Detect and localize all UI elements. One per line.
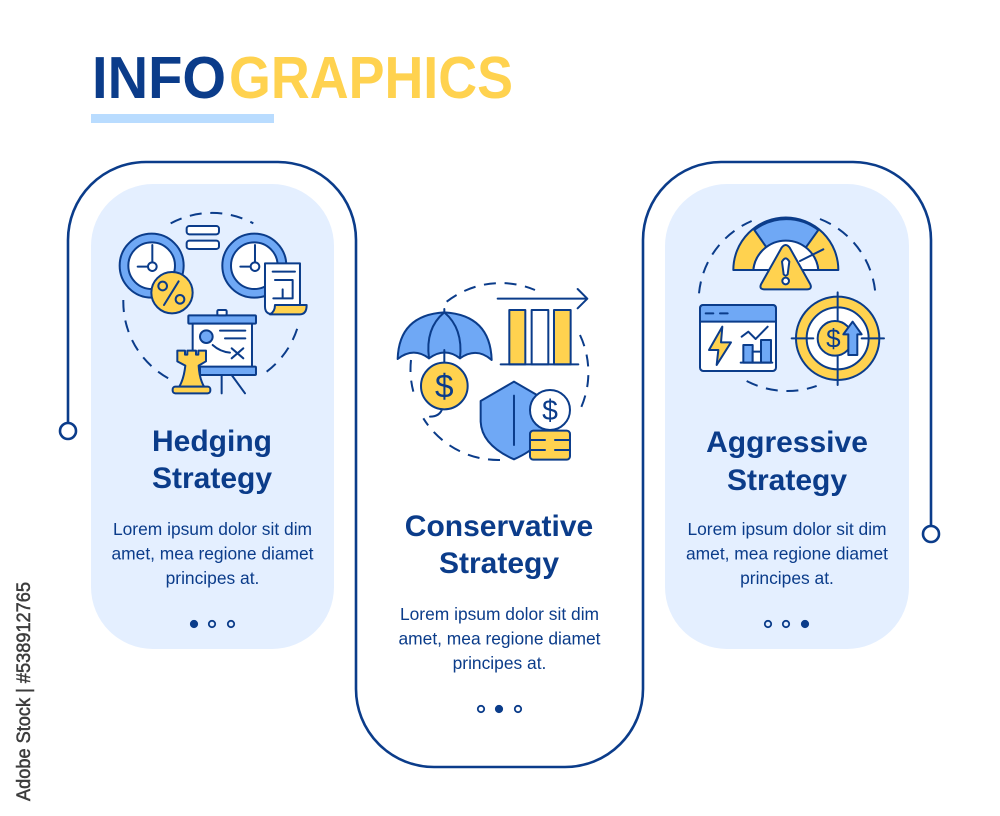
panel background: aggressive <box>665 184 909 649</box>
heading: aggressive: Aggressive <box>706 426 868 459</box>
icon: aggressive strategy <box>699 217 884 391</box>
text block: conservative: Lorem ipsum dolor sit dim <box>400 604 599 624</box>
panel background: hedging <box>91 184 334 649</box>
heading: aggressive line two: Strategy <box>727 464 847 497</box>
text block: hedging: principes at. <box>166 568 259 588</box>
text block: aggressive: amet, mea regione diamet <box>686 544 888 564</box>
title: GRAPHICS <box>229 45 513 111</box>
heading: conservative: Conservative <box>405 510 593 543</box>
pagination dots: conservative <box>478 706 521 712</box>
text block: conservative: principes at. <box>453 653 546 673</box>
icon: conservative strategy: $ <box>542 395 558 427</box>
text block: hedging: Lorem ipsum dolor sit dim <box>113 519 312 539</box>
text block: conservative: amet, mea regione diamet <box>398 628 601 648</box>
text block: aggressive: Lorem ipsum dolor sit dim <box>687 519 887 539</box>
heading: hedging line two: Strategy <box>152 462 272 495</box>
text block: aggressive: principes at. <box>740 568 834 588</box>
title <box>92 45 513 111</box>
heading: conservative line two: Strategy <box>439 547 559 580</box>
title: INFO <box>92 45 226 111</box>
connecting outline <box>60 162 939 767</box>
icon: conservative strategy: $ <box>435 369 454 406</box>
icon: hedging strategy <box>120 213 307 393</box>
pagination dots: aggressive <box>765 621 808 627</box>
heading: hedging: Hedging <box>152 425 272 458</box>
title underline <box>91 114 274 123</box>
pagination dots: hedging <box>191 621 234 627</box>
icon: conservative strategy <box>398 283 588 460</box>
text block: hedging: amet, mea regione diamet <box>111 544 314 564</box>
watermark credit: Adobe Stock | #538912765 <box>14 582 35 801</box>
icon: aggressive strategy: $ <box>826 323 841 353</box>
